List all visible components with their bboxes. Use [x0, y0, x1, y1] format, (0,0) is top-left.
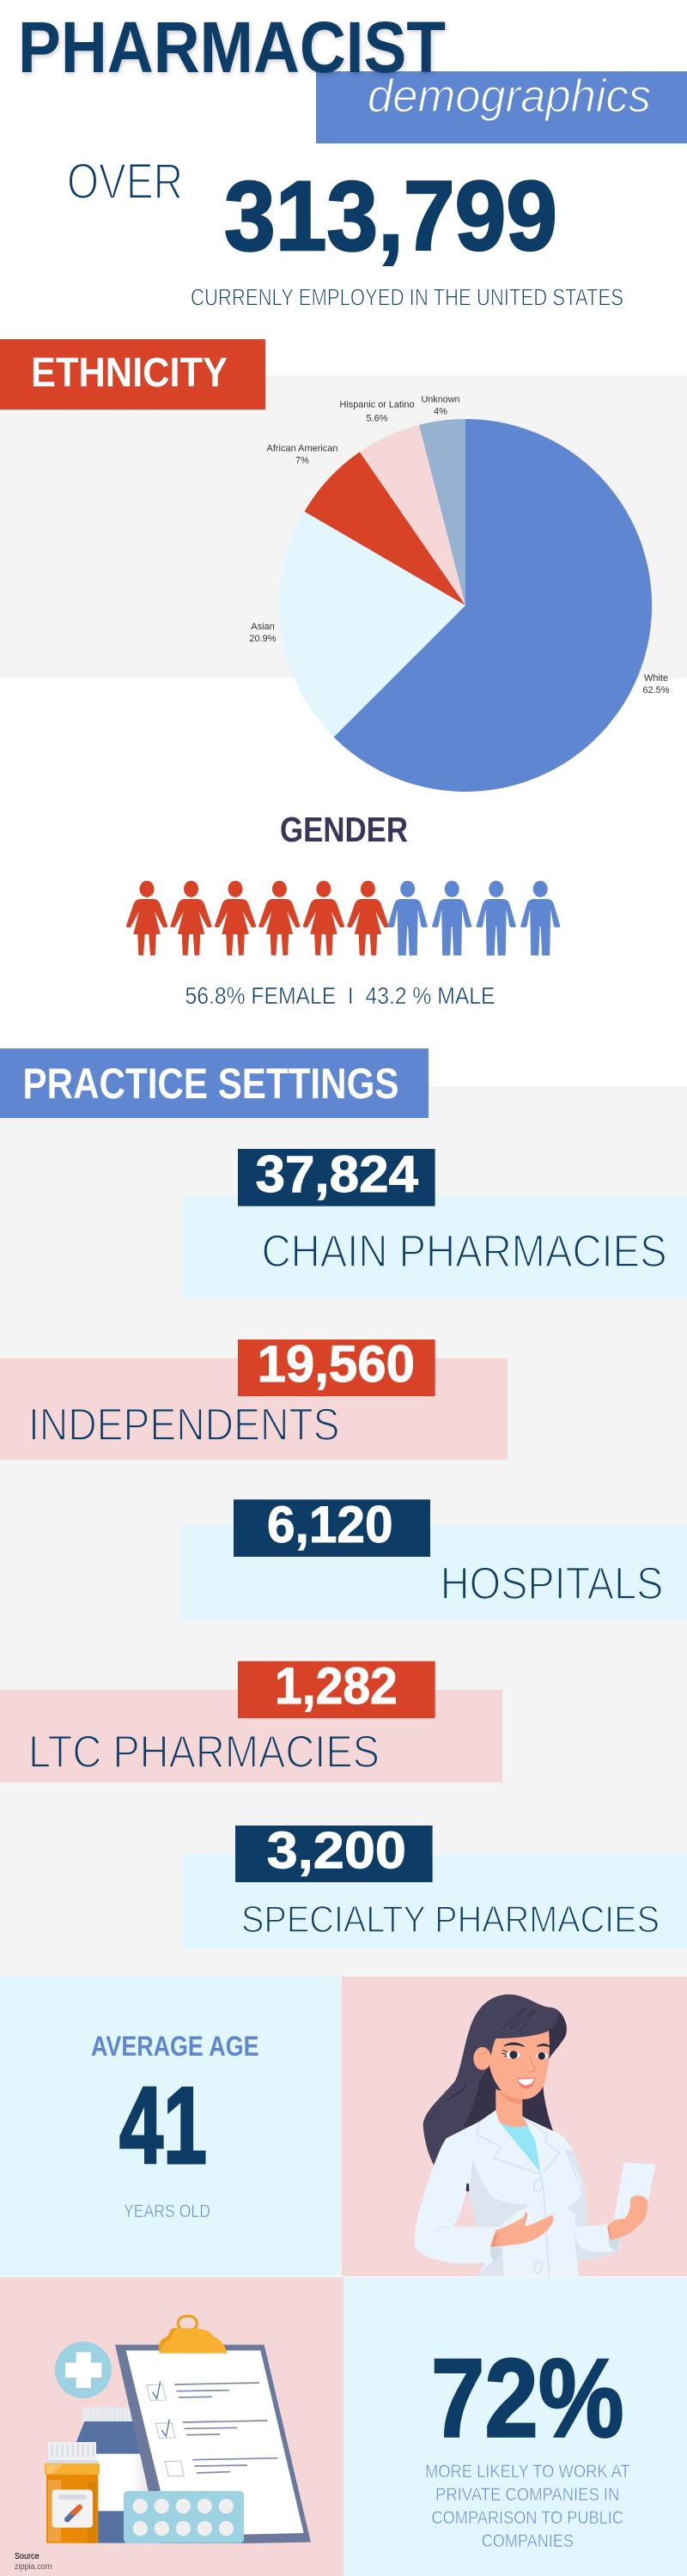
stat caption: PRIVATE COMPANIES IN: [435, 2485, 619, 2505]
setting: chain pharmacies: [182, 1145, 687, 1297]
panel: private companies stat: [344, 2277, 687, 2576]
gender split text: 56.8% FEMALE I 43.2 % MALE: [185, 982, 495, 1009]
source: zippia.com: [15, 2561, 52, 2572]
total employed stat: [67, 154, 623, 311]
setting: independents: [0, 1335, 508, 1460]
paper: [614, 2162, 655, 2221]
setting: independents: INDEPENDENTS: [28, 1400, 340, 1450]
heading: practice settings: [0, 1048, 429, 1118]
years old caption: YEARS OLD: [124, 2202, 210, 2221]
heading: gender: GENDER: [280, 810, 408, 849]
setting: specialty pharmacies: 3,200: [267, 1822, 406, 1879]
demographics banner: [316, 70, 687, 143]
age value: 41: [119, 2064, 207, 2186]
checklist: [147, 2381, 277, 2476]
coat: [415, 2110, 621, 2278]
stat caption: COMPARISON TO PUBLIC: [431, 2508, 623, 2528]
icon: medical cross: [55, 2342, 112, 2398]
clipboard: [115, 2316, 311, 2543]
stat caption: MORE LIKELY TO WORK AT: [425, 2462, 630, 2482]
pie labels: 5.6%: [366, 414, 388, 424]
big number: 313,799: [224, 161, 557, 271]
pill bottle: [45, 2442, 100, 2543]
illustration: pharmacist: [415, 1995, 655, 2278]
setting: ltc pharmacies: LTC PHARMACIES: [28, 1727, 380, 1777]
hands: [490, 2212, 553, 2247]
setting: specialty pharmacies: [182, 1822, 687, 1949]
panel: ethnicity: [0, 339, 687, 792]
average age heading: AVERAGE AGE: [91, 2031, 259, 2062]
pie labels: [249, 395, 670, 696]
source: [15, 2551, 52, 2572]
illustration: clipboard and medicine: [45, 2316, 311, 2543]
setting: independents: 19,560: [258, 1335, 415, 1393]
shirt: [500, 2123, 540, 2172]
panel: gender: [126, 810, 560, 1009]
pie labels: 4%: [434, 407, 447, 417]
demographics banner: demographics: [368, 70, 651, 122]
over label: OVER: [67, 154, 183, 210]
pie labels: Unknown: [421, 395, 460, 405]
title: PHARMACIST: [18, 7, 446, 88]
pie labels: 62.5%: [642, 685, 670, 696]
pie labels: 20.9%: [249, 634, 277, 644]
setting: chain pharmacies: 37,824: [256, 1145, 419, 1203]
panel: practice settings: [0, 1048, 687, 1977]
setting: hospitals: [180, 1496, 687, 1621]
panel: average age: [0, 1977, 340, 2276]
stat caption: COMPANIES: [482, 2531, 574, 2551]
pie labels: 7%: [295, 455, 309, 465]
panel: pharmacist illustration: [342, 1977, 687, 2278]
setting: ltc pharmacies: 1,282: [275, 1657, 398, 1715]
blister pack: [124, 2491, 244, 2543]
neck and head: [495, 2089, 528, 2128]
heading: ethnicity: ETHNICITY: [31, 350, 228, 396]
setting: hospitals: HOSPITALS: [441, 1558, 663, 1609]
large bottle: [76, 2407, 161, 2543]
heading: practice settings: PRACTICE SETTINGS: [22, 1060, 398, 1108]
pie labels: White: [644, 673, 668, 683]
lapels and buttons: [477, 2117, 581, 2276]
percentage value: 72%: [431, 2336, 623, 2461]
pie chart: [279, 419, 652, 792]
pictogram: people: [126, 881, 560, 956]
setting: hospitals: 6,120: [267, 1496, 393, 1553]
pie labels: Asian: [251, 622, 275, 632]
header: [18, 7, 687, 143]
pie labels: African American: [266, 443, 338, 453]
stat caption: [425, 2462, 630, 2551]
panel: clipboard illustration: [0, 2277, 344, 2576]
heading: ethnicity: [0, 339, 265, 410]
setting: ltc pharmacies: [0, 1657, 502, 1783]
source: Source: [15, 2551, 40, 2561]
pie labels: Hispanic or Latino: [340, 400, 414, 410]
